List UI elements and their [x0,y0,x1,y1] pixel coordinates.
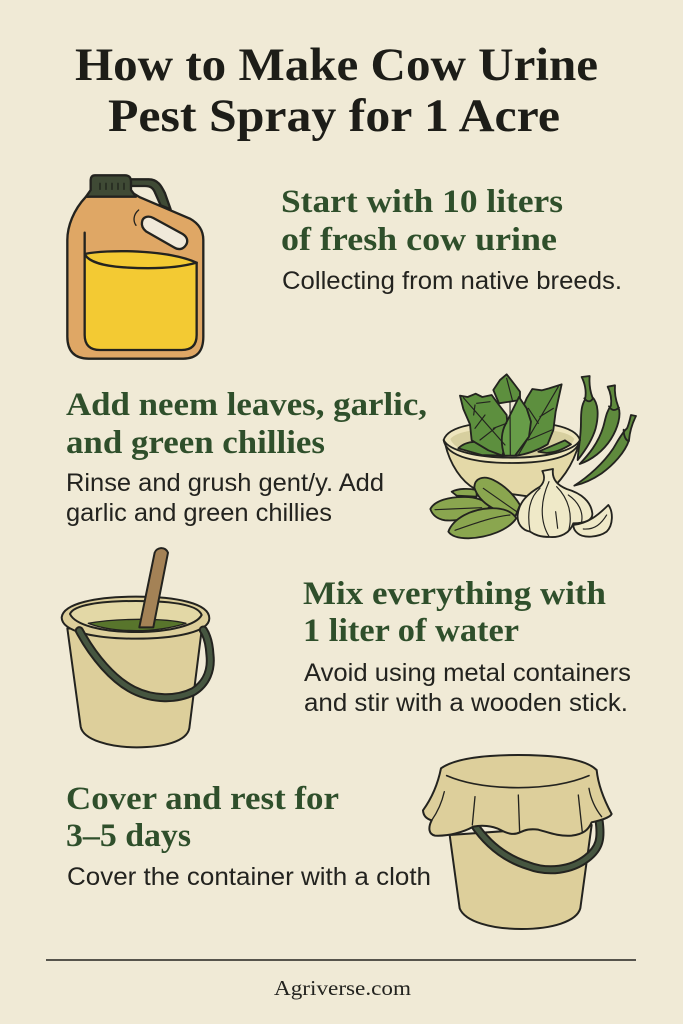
step 2 heading: and green chillies [66,425,325,461]
step 4 heading [66,781,339,854]
garlic head [518,469,592,537]
lower left leaves [430,478,520,538]
step 2 description: garlic and green chillies [66,499,332,527]
step 1 description: Collecting from native breeds. [282,267,622,295]
step 4 heading: 3–5 days [66,818,191,854]
step 3 description: Avoid using metal containers [304,659,631,687]
step 1 heading [281,184,563,258]
step 3 heading: 1 liter of water [303,613,519,649]
bowl front rim [444,440,580,463]
title [75,39,598,142]
step 3 text [303,576,631,717]
step 2 heading: Add neem leaves, garlic, [66,387,427,423]
garlic clove [573,505,612,537]
bowl [445,443,579,498]
neem leaves [458,374,571,456]
step 3 description [304,659,631,717]
footer: website: Agriverse.com [274,976,411,1000]
step 4 heading: Cover and rest for [66,781,339,817]
chillies [574,376,636,486]
step 1 heading: Start with 10 liters [281,184,563,220]
step 1 heading: of fresh cow urine [281,222,557,258]
icon: bucket covered with cloth [423,755,612,929]
icon: jug of cow urine [67,175,203,359]
step 3 heading: Mix everything with [303,576,606,612]
icon: bowl with neem leaves, garlic and chillies [430,374,636,538]
step 3 description: and stir with a wooden stick. [304,689,628,717]
step 2 text [66,387,427,527]
step 3 heading [303,576,606,649]
step 2 description: Rinse and grush gent/y. Add [66,469,384,497]
step 4 description: Cover the container with a cloth [67,863,431,891]
step 4 text [66,781,431,891]
step 2 heading [66,387,427,461]
title: Pest Spray for 1 Acre [108,90,560,142]
step 2 description [66,469,384,527]
title: How to Make Cow Urine [75,39,598,91]
step 1 text [281,184,622,295]
footer divider [46,959,636,961]
icon: bucket with wooden stick [62,548,210,747]
